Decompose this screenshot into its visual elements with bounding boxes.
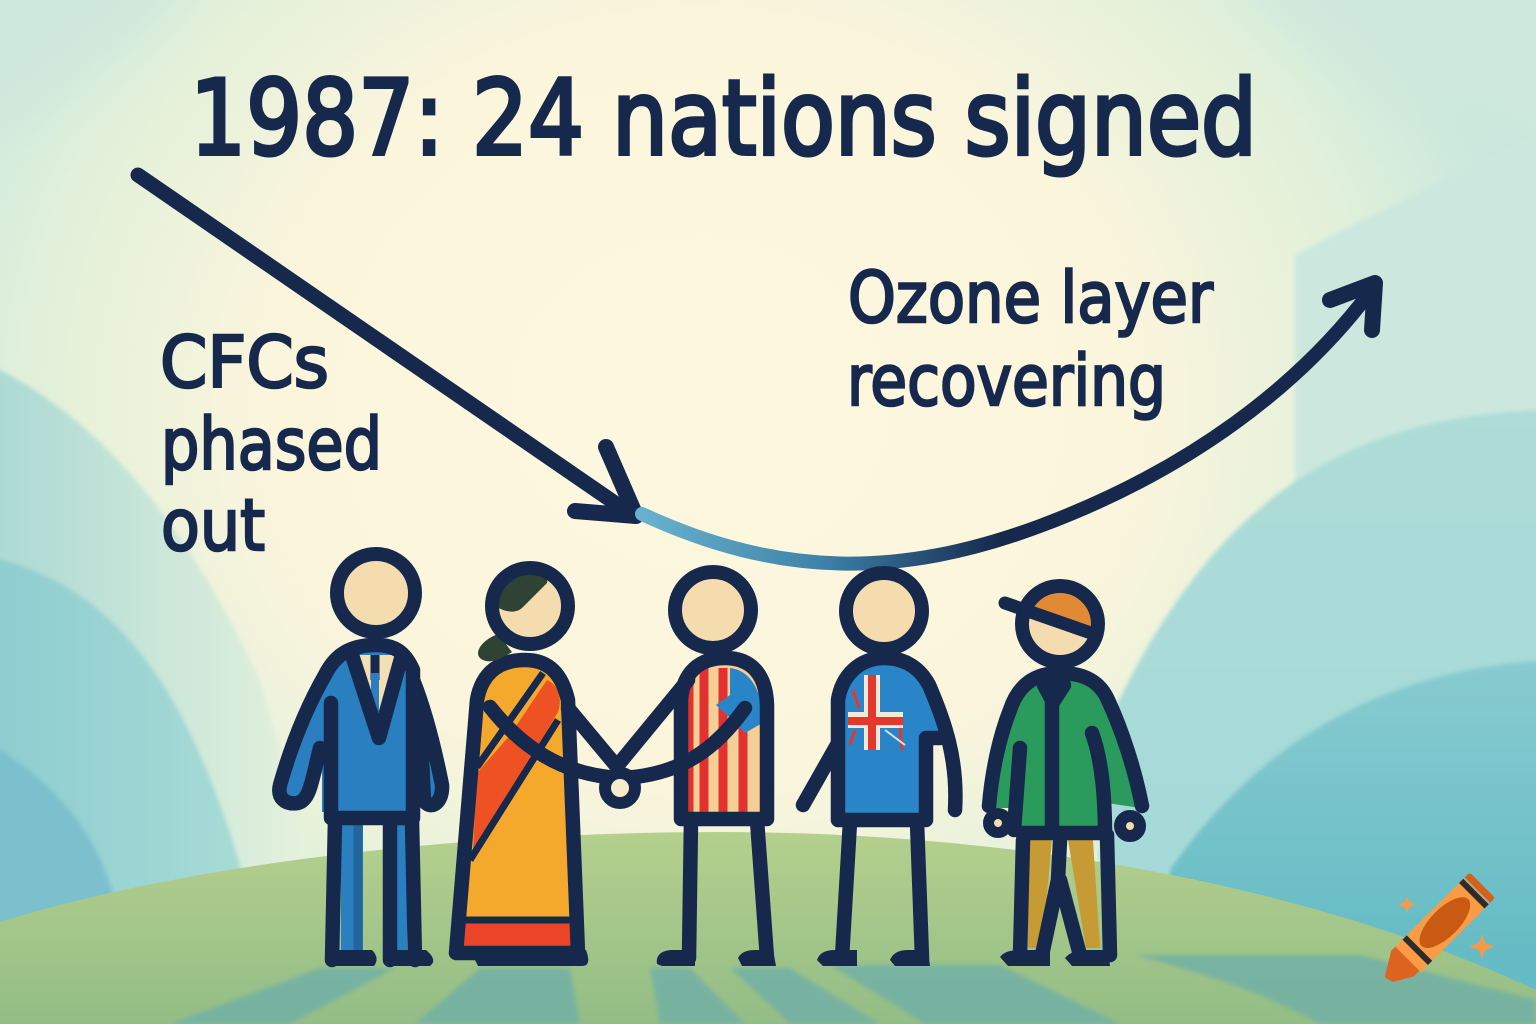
person 5: green jacket and cap — [988, 570, 1142, 966]
handshake — [605, 773, 635, 803]
person 2: saree — [455, 560, 620, 966]
arrow: ozone recovering — [642, 283, 1375, 564]
label: Ozone layer recovering: recovering — [847, 340, 1166, 422]
label: CFCs phased out — [160, 321, 382, 567]
label: CFCs phased out: CFCs — [160, 321, 329, 404]
person 3: striped shirt — [605, 572, 776, 966]
label: Ozone layer recovering: Ozone layer — [848, 257, 1213, 339]
ground hill — [0, 832, 1536, 1024]
title: 1987: 24 nations signed — [190, 59, 1257, 179]
label: Ozone layer recovering — [847, 257, 1213, 422]
icon: crayon logo — [1375, 872, 1495, 993]
person 1: suit — [279, 554, 442, 966]
arrow: CFCs falling — [138, 175, 636, 516]
label: CFCs phased out: phased — [161, 403, 382, 486]
person 4: flag shirt — [803, 573, 955, 966]
label: CFCs phased out: out — [161, 484, 265, 567]
